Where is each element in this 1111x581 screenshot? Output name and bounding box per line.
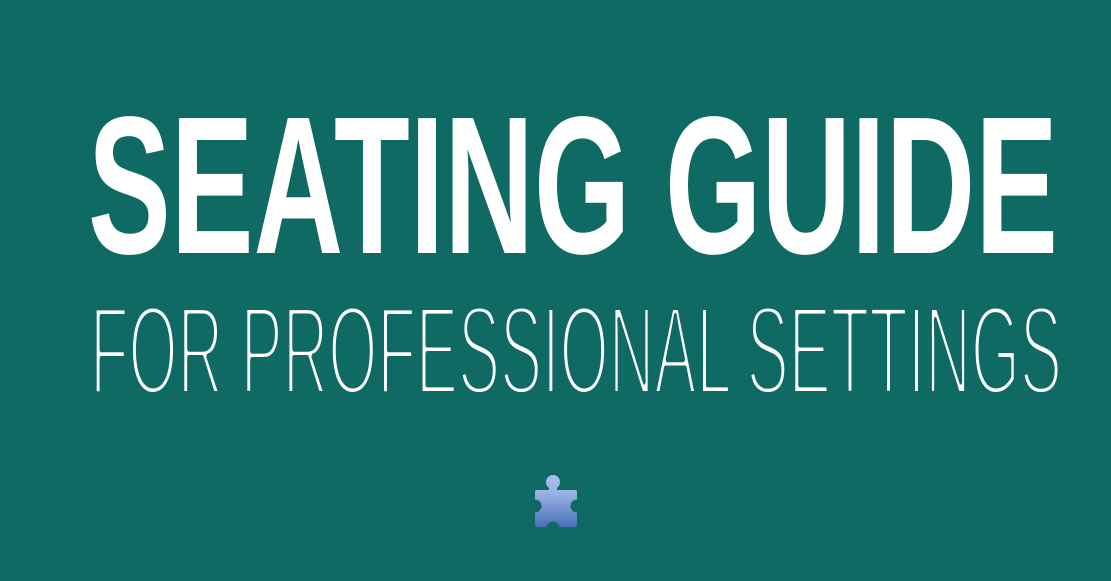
- icon: puzzle piece: [528, 475, 584, 534]
